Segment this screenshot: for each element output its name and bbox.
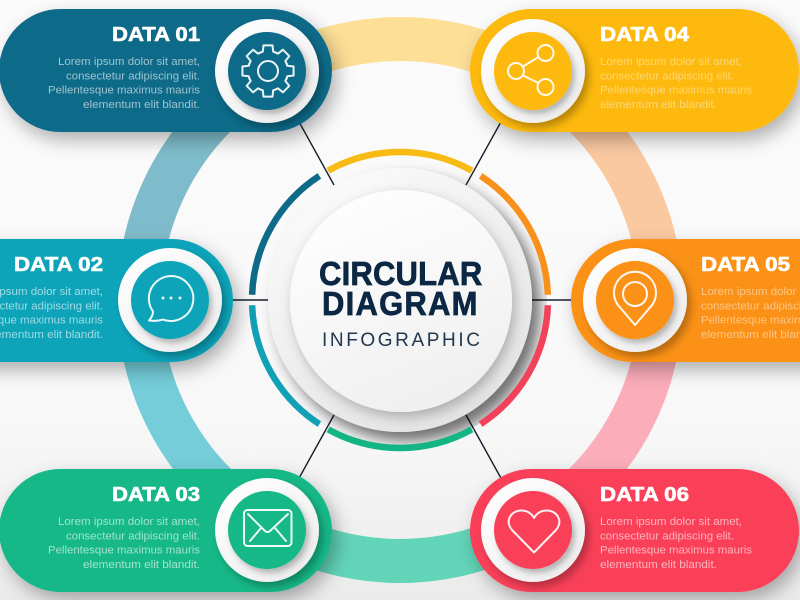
title: DIAGRAM xyxy=(322,285,479,322)
hub shadow disc xyxy=(268,168,532,432)
title: CIRCULAR xyxy=(319,255,482,292)
text block: data 06: Pellentesque maximus mauris xyxy=(600,545,753,557)
panel: data 06 xyxy=(470,469,799,592)
text block: data 03: Lorem ipsum dolor sit amet, xyxy=(58,516,200,528)
icon: share xyxy=(481,19,585,123)
text block: data 06: consectetur adipiscing elit. xyxy=(600,530,734,542)
icon: heart xyxy=(481,478,585,582)
text block: data 04: Pellentesque maximus mauris xyxy=(600,85,753,97)
text block: data 01: consectetur adipiscing elit. xyxy=(66,70,200,82)
text block: data 01: Lorem ipsum dolor sit amet, xyxy=(58,56,200,68)
panel: data 04 xyxy=(470,9,799,132)
text block: data 01: elementum elit blandit. xyxy=(83,99,200,111)
heading: data 01: DATA 01 xyxy=(112,24,200,46)
heading: data 02: DATA 02 xyxy=(14,254,103,276)
title xyxy=(319,255,482,351)
icon: envelope xyxy=(215,478,319,582)
icon: gear xyxy=(215,19,319,123)
title: INFOGRAPHIC xyxy=(322,330,480,351)
segmented colour ring xyxy=(252,152,548,448)
hub top disc xyxy=(290,190,512,412)
text block: data 04: consectetur adipiscing elit. xyxy=(600,70,734,82)
text block: data 06 xyxy=(600,516,753,571)
connector lines xyxy=(228,120,576,480)
heading: data 04: DATA 04 xyxy=(600,24,690,46)
icon: speech bubble xyxy=(118,248,222,352)
central hub xyxy=(252,152,548,448)
heading: data 06: DATA 06 xyxy=(600,484,689,506)
text block: data 04 xyxy=(600,56,753,111)
text block: data 03: elementum elit blandit. xyxy=(83,559,200,571)
text block: data 06: elementum elit blandit. xyxy=(600,559,717,571)
panel: data 01 xyxy=(0,9,332,132)
text block: data 01: Pellentesque maximus mauris xyxy=(48,85,201,97)
heading: data 05: DATA 05 xyxy=(701,254,790,276)
text block: data 03 xyxy=(48,516,201,571)
text block: data 03: Pellentesque maximus mauris xyxy=(48,545,201,557)
text block: data 04: elementum elit blandit. xyxy=(600,99,717,111)
panel: data 05 xyxy=(571,239,800,362)
outer ring xyxy=(139,39,661,561)
text block: data 05 xyxy=(701,286,800,341)
icon: map pin xyxy=(583,248,687,352)
panel: data 03 xyxy=(0,469,332,592)
text block: data 03: consectetur adipiscing elit. xyxy=(66,530,200,542)
text block: data 06: Lorem ipsum dolor sit amet, xyxy=(600,516,742,528)
heading: data 03: DATA 03 xyxy=(112,484,200,506)
text block: data 04: Lorem ipsum dolor sit amet, xyxy=(600,56,742,68)
panel: data 02 xyxy=(0,239,233,362)
text block: data 01 xyxy=(48,56,201,111)
text block: data 02 xyxy=(0,286,104,341)
